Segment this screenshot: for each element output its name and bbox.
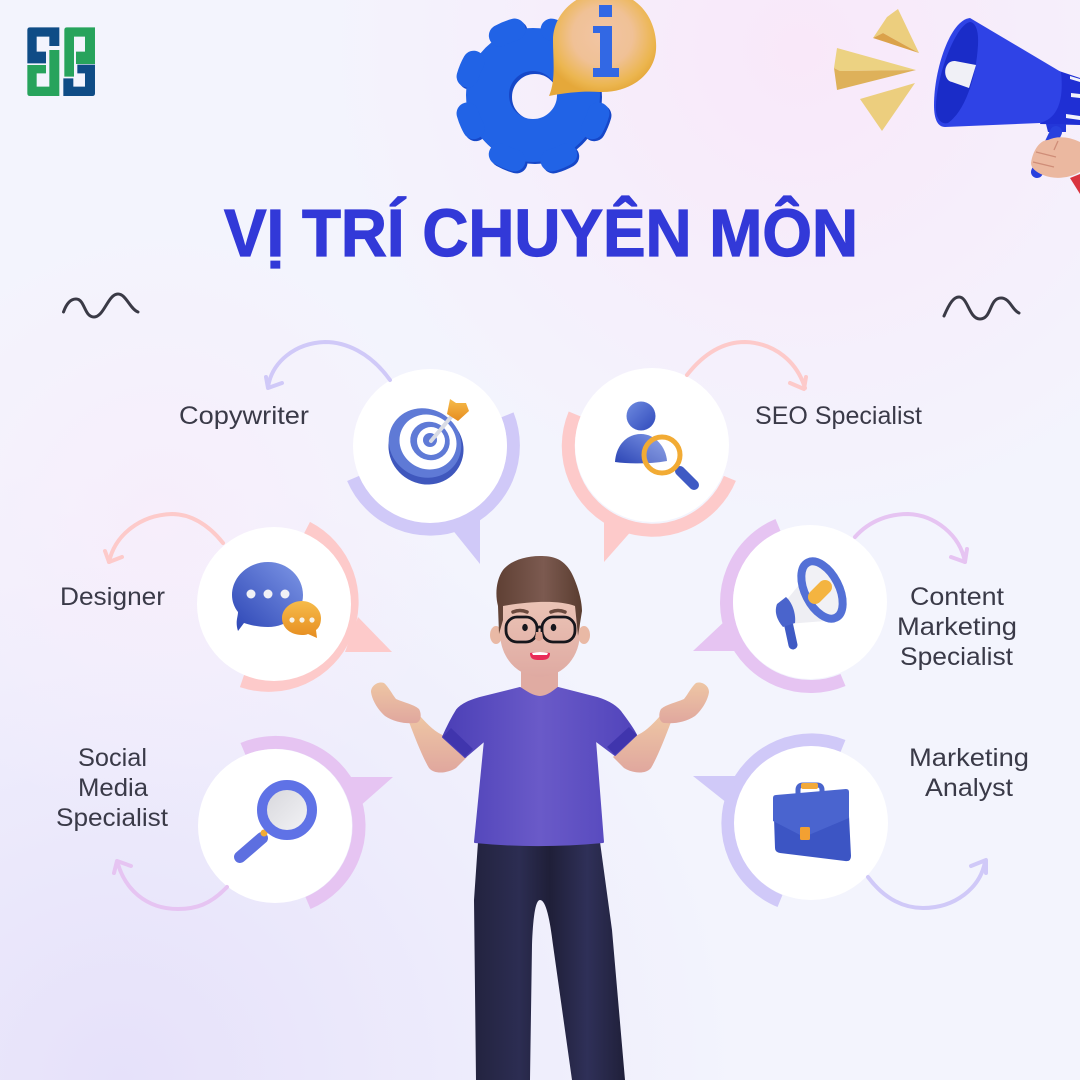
face [500, 600, 580, 677]
label: Content Marketing Specialist: Specialist [900, 643, 1013, 671]
glasses [506, 617, 575, 642]
speech ring [242, 528, 392, 685]
speech ring [568, 414, 730, 562]
icon: megaphone held by hand [934, 18, 1080, 194]
neck [521, 665, 558, 698]
panel: Marketing Analyst [693, 740, 888, 901]
icon: megaphone [776, 555, 851, 645]
arrow: Marketing Analyst [868, 860, 986, 908]
gear [465, 27, 603, 165]
label: Designer: Designer [60, 583, 165, 611]
arrow: Designer [105, 514, 223, 562]
panel: SEO Specialist [568, 368, 730, 562]
icon: gear with info bubble [465, 0, 656, 165]
label: Social Media Specialist: Social [78, 744, 147, 772]
icon: chat bubbles [232, 562, 321, 638]
panel: Social Media Specialist [198, 742, 393, 903]
label: SEO Specialist: SEO Specialist [755, 402, 922, 430]
white disc [733, 525, 887, 679]
hair [496, 556, 582, 636]
label: Content Marketing Specialist [897, 583, 1017, 671]
right arm [613, 682, 709, 773]
decorative wave left [64, 294, 138, 317]
info speech bubble [549, 0, 656, 96]
label: Social Media Specialist: Specialist [56, 804, 168, 832]
icon: person with magnifier [615, 402, 694, 485]
label: Social Media Specialist [56, 744, 168, 832]
right ear [578, 626, 590, 644]
logo [27, 27, 95, 96]
left ear [490, 626, 502, 644]
panel: Designer [197, 527, 392, 685]
white disc [353, 369, 507, 523]
white disc [575, 368, 729, 522]
character: man shrugging [371, 556, 709, 1080]
white disc [734, 746, 888, 900]
label: Content Marketing Specialist: Marketing [897, 613, 1017, 641]
mouth [530, 652, 550, 660]
label: Marketing Analyst [909, 744, 1029, 802]
label: Copywriter: Copywriter [179, 402, 309, 430]
arrow: Social Media Specialist [114, 861, 227, 909]
trousers [474, 842, 625, 1080]
icon: sound burst triangles [834, 9, 919, 131]
arrow: SEO Specialist [687, 342, 806, 389]
title: VỊ TRÍ CHUYÊN MÔN [224, 196, 858, 271]
speech ring [353, 415, 513, 564]
arrow: Copywriter [266, 342, 390, 388]
nose [535, 632, 543, 641]
label: Marketing Analyst: Marketing [909, 744, 1029, 772]
t-shirt [443, 688, 637, 845]
white disc [197, 527, 351, 681]
decorative wave right [944, 297, 1019, 319]
panel: Copywriter [353, 369, 513, 564]
eyes [522, 624, 556, 631]
white disc [198, 749, 352, 903]
arrow: Content Marketing Specialist [855, 514, 967, 562]
icon: target with arrow [375, 395, 477, 498]
speech ring [693, 525, 843, 687]
speech ring [693, 740, 843, 901]
icon: briefcase [773, 783, 851, 861]
label: Marketing Analyst: Analyst [925, 774, 1013, 802]
panel: Content Marketing Specialist [693, 525, 887, 687]
left arm [371, 682, 467, 773]
speech ring [243, 742, 393, 903]
label: Social Media Specialist: Media [78, 774, 148, 802]
icon: magnifier [240, 785, 312, 857]
eyebrows [513, 610, 565, 612]
label: Content Marketing Specialist: Content [910, 583, 1004, 611]
